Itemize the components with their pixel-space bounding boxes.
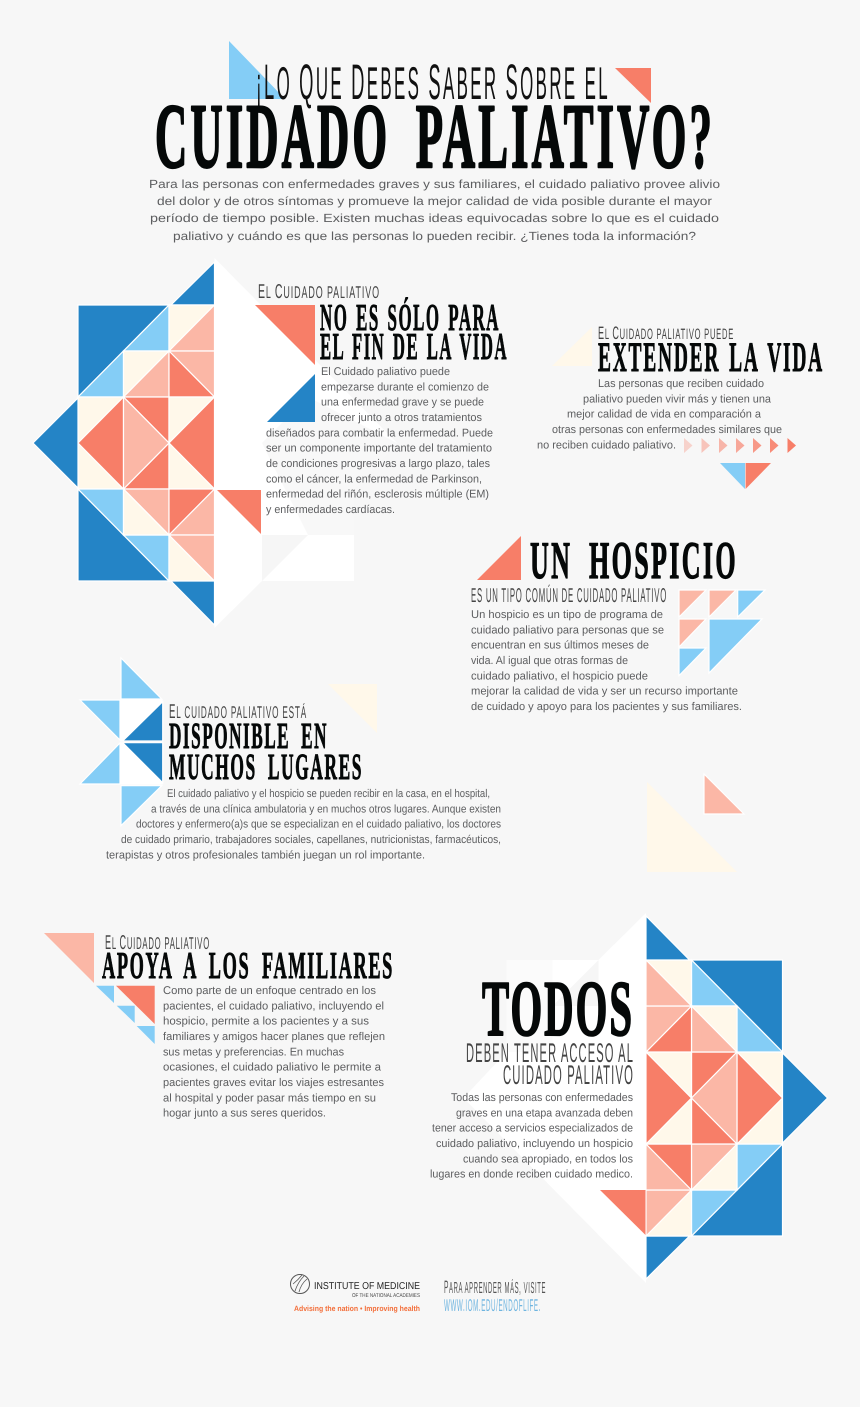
text block: section 6 bbox=[430, 1092, 633, 1181]
logo: institute of medicine: OF THE NATIONAL ACADEMIES bbox=[352, 1293, 420, 1299]
heading: todos deben tener acceso bbox=[466, 966, 634, 1090]
heading: no es solo para el fin de la vida: EL CUIDADO PALIATIVO bbox=[258, 281, 380, 303]
heading: un hospicio bbox=[471, 532, 738, 607]
text block: section 4: El cuidado paliativo y el hospicio se pueden recibir en la casa, en el hospital, bbox=[167, 788, 490, 800]
text block: section 2: otras personas con enfermedades similares que bbox=[552, 424, 782, 436]
text: CUIDADO PALIATIVO bbox=[503, 1060, 634, 1090]
decorative triangle: cream section 2 bbox=[552, 327, 592, 366]
text block: section 1 bbox=[266, 366, 493, 516]
icon: triangle cluster section 3 bbox=[679, 590, 765, 676]
decorative triangle: salmon title bbox=[615, 68, 651, 103]
intro text: del dolor y de otros síntomas y promueve la mejor calidad de vida posible durante el mayor bbox=[157, 194, 712, 208]
text block: section 6: tener acceso a servicios especializados de bbox=[432, 1123, 633, 1135]
panel: white star shape right bbox=[464, 913, 646, 1283]
intro text: período de tiempo posible. Existen muchas ideas equivocadas sobre lo que es el cuidado bbox=[150, 211, 720, 225]
heading: apoya a los familiares: EL CUIDADO PALIATIVO bbox=[105, 932, 210, 954]
text block: section 1: El Cuidado paliativo puede bbox=[321, 366, 450, 378]
text block: section 3: Un hospicio es un tipo de programa de bbox=[471, 609, 663, 621]
text block: section 1: de condiciones progresivas a largo plazo, tales bbox=[266, 458, 490, 470]
text: WWW.IOM.EDU/ENDOFLIFE. bbox=[444, 1296, 541, 1315]
heading: todos deben tener acceso: TODOS bbox=[482, 966, 634, 1053]
heading: apoya a los familiares bbox=[102, 932, 394, 987]
text block: section 5: hogar junto a sus seres queridos. bbox=[163, 1108, 326, 1120]
text block: section 4 bbox=[106, 788, 501, 861]
text block: section 1: empezarse durante el comienzo de bbox=[321, 381, 489, 393]
panel: white star shape left bbox=[214, 258, 397, 628]
text block: section 6: lugares en donde reciben cuidado medico. bbox=[430, 1169, 633, 1181]
decorative triangle: blue title bbox=[229, 41, 285, 99]
icon: geometric star right bbox=[646, 916, 828, 1279]
title: ¡LO QUE DEBES SABER SOBRE EL bbox=[256, 54, 610, 110]
text: PARA APRENDER MÁS, VISITE bbox=[444, 1277, 546, 1297]
logo: institute of medicine bbox=[290, 1274, 420, 1313]
icon: row of arrows bbox=[684, 438, 796, 453]
heading: no es solo para el fin de la vida bbox=[258, 281, 508, 368]
text block: section 1: ofrecer junto a otros tratamientos bbox=[321, 412, 482, 424]
text block: section 5: hospicio, permite a los pacientes y a sus bbox=[163, 1016, 369, 1028]
text block: section 6: cuando sea apropiado, en todos los bbox=[463, 1153, 633, 1165]
text block: section 2: Las personas que reciben cuidado bbox=[598, 378, 764, 390]
intro text: paliativo y cuándo es que las personas lo pueden recibir. ¿Tienes toda la información? bbox=[173, 229, 696, 243]
text block: section 3: cuidado paliativo para personas que se bbox=[471, 624, 664, 636]
decorative triangles: section 1 bbox=[217, 305, 315, 534]
heading: disponible en muchos lugares: EL CUIDADO PALIATIVO ESTÁ bbox=[169, 701, 307, 723]
text block: section 3: de cuidado y apoyo para los pacientes y sus familiares. bbox=[471, 701, 742, 713]
footer link text bbox=[444, 1277, 546, 1315]
text block: section 2 bbox=[537, 378, 782, 451]
decorative triangle: salmon section 6 bbox=[600, 1190, 646, 1235]
text: MUCHOS LUGARES bbox=[169, 747, 363, 788]
decorative triangles: right of section 4 bbox=[647, 774, 744, 872]
text block: section 1: diseñados para combatir la enfermedad. Puede bbox=[266, 427, 493, 439]
icon: geometric star left bbox=[33, 262, 214, 625]
text block: section 4: doctores y enfermero(a)s que se especializan en el cuidado paliativo, los doctores bbox=[136, 819, 501, 831]
text block: section 5: familiares y amigos hacer planes que reflejen bbox=[163, 1031, 385, 1043]
text block: section 6: graves en una etapa avanzada deben bbox=[456, 1107, 633, 1119]
text: NO ES SÓLO PARA bbox=[320, 297, 500, 339]
text block: section 1: como el cáncer, la enfermedad de Parkinson, bbox=[266, 473, 482, 485]
text block: section 5: pacientes graves evitar los viajes estresantes bbox=[163, 1077, 384, 1089]
text block: section 5: sus metas y preferencias. En muchas bbox=[163, 1046, 344, 1058]
text block: section 4: terapistas y otros profesionales también juegan un rol importante. bbox=[106, 849, 425, 861]
heading: disponible en muchos lugares bbox=[169, 701, 363, 788]
heading: disponible en muchos lugares: DISPONIBLE EN bbox=[169, 716, 328, 757]
text block: section 3: cuidado paliativo, el hospicio puede bbox=[471, 670, 648, 682]
decorative triangle: light salmon section 5 bbox=[44, 933, 94, 983]
text block: section 3: vida. Al igual que otras formas de bbox=[471, 655, 628, 667]
text block: section 2: paliativo pueden vivir más y tienen una bbox=[583, 393, 772, 405]
title bbox=[155, 54, 715, 187]
heading: extender la vida: EL CUIDADO PALIATIVO PUEDE bbox=[598, 323, 734, 343]
text block: section 5: ocasiones, el cuidado paliativo le permite a bbox=[163, 1062, 382, 1074]
text: EL FIN DE LA VIDA bbox=[320, 326, 508, 368]
text: APOYA A LOS FAMILIARES bbox=[102, 945, 394, 987]
logo: institute of medicine: INSTITUTE OF MEDICINE bbox=[314, 1281, 420, 1292]
text block: section 3 bbox=[471, 609, 742, 713]
text block: section 3: mejorar la calidad de vida y ser un recurso importante bbox=[471, 686, 738, 698]
decorative triangle: cream section 4 bbox=[328, 684, 377, 733]
text block: section 6: Todas las personas con enfermedades bbox=[451, 1092, 633, 1104]
icon: blue pinwheel section 4 bbox=[80, 658, 163, 826]
text block: section 4: de cuidado primario, trabajadores sociales, capellanes, nutricionistas, farmacéuticos, bbox=[121, 834, 501, 846]
text block: section 5 bbox=[163, 985, 385, 1120]
text block: section 6: cuidado paliativo, incluyendo un hospicio bbox=[436, 1138, 633, 1150]
text block: section 4: a través de una clínica ambulatoria y en muchos otros lugares. Aunque existen bbox=[151, 803, 501, 815]
text block: section 5: Como parte de un enfoque centrado en los bbox=[163, 985, 376, 997]
decorative triangle: salmon section 3 bbox=[477, 536, 521, 580]
text block: section 2: mejor calidad de vida en comparación a bbox=[567, 409, 762, 421]
icon: triangle cluster section 5 bbox=[96, 986, 155, 1044]
text block: section 2: no reciben cuidado paliativo. bbox=[537, 439, 676, 451]
text block: section 1: una enfermedad grave y se puede bbox=[321, 397, 484, 409]
text block: section 1: enfermedad del riñón, esclerosis múltiple (EM) bbox=[266, 489, 489, 501]
icon: blue and salmon downward triangle bbox=[720, 463, 771, 489]
text block: section 5: al hospital y poder pasar más tiempo en su bbox=[163, 1092, 376, 1104]
intro text bbox=[149, 177, 721, 243]
text block: section 1: ser un componente importante del tratamiento bbox=[266, 443, 492, 455]
logo: institute of medicine: Advising the nation • Improving health bbox=[294, 1304, 420, 1313]
text block: section 3: encuentran en sus últimos meses de bbox=[471, 640, 649, 652]
text block: section 1: y enfermedades cardíacas. bbox=[266, 504, 395, 516]
text block: section 5: pacientes, el cuidado paliativo, incluyendo el bbox=[163, 1000, 384, 1012]
intro text: Para las personas con enfermedades graves y sus familiares, el cuidado paliativo provee alivio bbox=[149, 177, 721, 191]
